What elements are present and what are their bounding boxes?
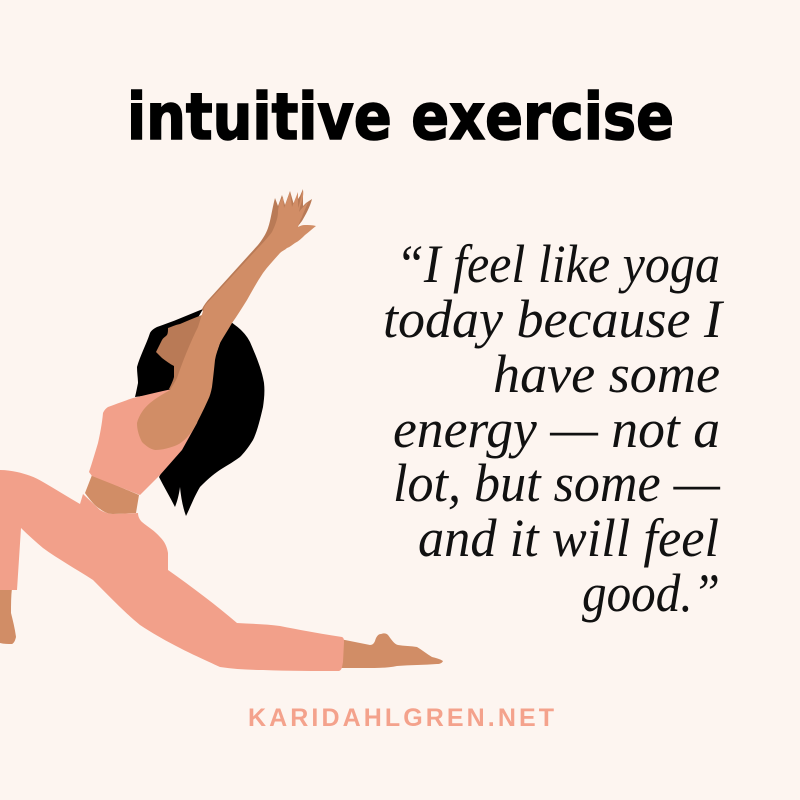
quote: “I feel like yoga [396, 234, 720, 294]
quote: energy — not a [393, 399, 720, 459]
midriff [85, 475, 139, 514]
raised arm [137, 190, 316, 450]
crop top [89, 389, 205, 495]
hair: back [159, 320, 264, 516]
quote: have some [493, 344, 720, 404]
quote [383, 234, 725, 623]
illustration: yoga figure [0, 189, 443, 671]
title: intuitive exercise [127, 81, 674, 155]
hair: front [135, 309, 203, 397]
quote: good.” [582, 563, 720, 623]
quote: today because I [383, 289, 725, 349]
quote: lot, but some — [393, 453, 721, 513]
leg: front foot [338, 633, 443, 668]
face and neck [156, 315, 205, 392]
raised arm: shadow and far fingers [202, 189, 312, 330]
quote: and it will feel [418, 508, 719, 568]
leggings [0, 470, 344, 671]
leg: back foot [0, 588, 16, 644]
footer website: KARIDAHLGREN.NET [248, 704, 554, 732]
